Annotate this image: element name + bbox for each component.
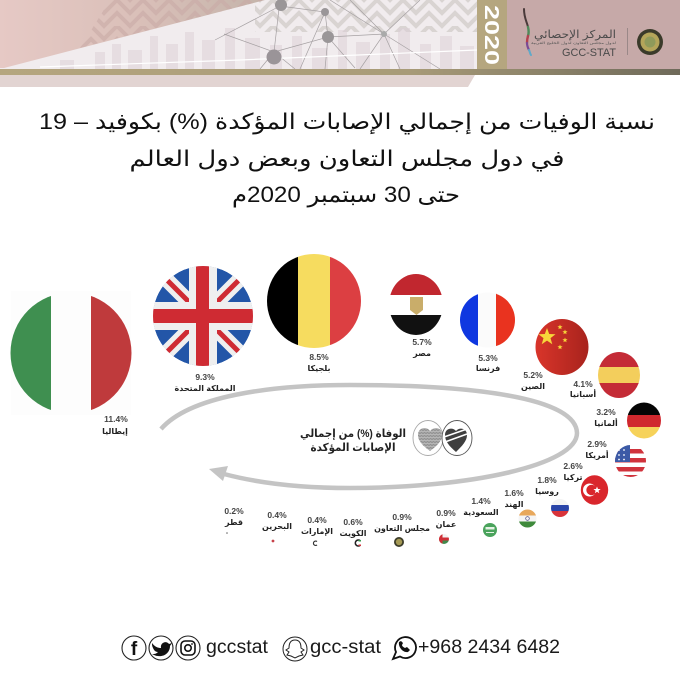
flag: Turkey: [581, 475, 608, 505]
label: United Kingdom: المملكة المتحدة: [175, 384, 236, 393]
icon: twitter: [149, 636, 173, 660]
flag: Kuwait: [355, 540, 361, 546]
flag: Belgium: [267, 250, 362, 350]
flag: Saudi Arabia: [483, 523, 497, 537]
label: Egypt: 5.7%: [412, 337, 432, 347]
label: Saudi Arabia: 1.4%: [471, 496, 491, 506]
icon: GCC emblem: [637, 29, 663, 55]
label: India: الهند: [505, 500, 524, 509]
label: Spain: 4.1%: [573, 379, 593, 389]
label: France: 5.3%: [478, 353, 498, 363]
icon: whatsapp: [393, 637, 416, 659]
label: Kuwait: الكويت: [340, 529, 367, 538]
flag: China: [536, 319, 588, 375]
network lines: [215, 0, 440, 69]
flag: Italy: [10, 290, 132, 415]
label: Germany: 3.2%: [596, 407, 616, 417]
label: GCC: مجلس التعاون: [374, 524, 430, 534]
title: [39, 109, 655, 207]
label: Germany: [594, 407, 618, 428]
flag: Russia: [551, 499, 569, 517]
label: India: [504, 488, 524, 509]
label: Russia: روسيا: [535, 487, 559, 496]
label: USA: [585, 439, 609, 460]
flag: Oman: [439, 534, 449, 544]
label: China: [521, 370, 545, 391]
logo panel: GCC-STAT: [562, 47, 616, 59]
label: Oman: عمان: [436, 520, 456, 529]
label: China: 5.2%: [523, 370, 543, 380]
label: Qatar: 0.2%: [224, 506, 244, 516]
label: Qatar: قطر: [224, 518, 243, 527]
label: Saudi Arabia: [463, 496, 499, 517]
label: Italy: [102, 414, 128, 436]
flag: UAE: [313, 541, 317, 545]
label: China: الصين: [521, 382, 545, 391]
flag: United Kingdom: [153, 266, 253, 366]
label: Russia: [535, 475, 559, 496]
logo panel: [507, 0, 680, 69]
title: نسبة الوفيات من إجمالي الإصابات المؤكدة (%) بكوفيد – 19: [39, 109, 655, 135]
label: United Kingdom: [175, 372, 236, 393]
label: Kuwait: 0.6%: [343, 517, 363, 527]
label: UAE: الإمارات: [301, 527, 333, 536]
label: Oman: [436, 508, 456, 529]
footer: social contacts: +968 2434 6482: [418, 637, 560, 658]
label: Belgium: [308, 352, 330, 373]
label: France: فرنسا: [476, 364, 500, 373]
label: Germany: ألمانيا: [594, 418, 618, 428]
arrow: circular trend: [161, 385, 577, 488]
label: Belgium: بلجيكا: [308, 364, 330, 373]
label: Bahrain: 0.4%: [267, 510, 287, 520]
footer: social contacts: gccstat: [206, 637, 269, 658]
label: UAE: 0.4%: [307, 515, 327, 525]
label: Russia: 1.8%: [537, 475, 557, 485]
footer: social contacts: [122, 636, 560, 661]
flag: Spain: [597, 351, 641, 399]
label: Qatar: [224, 506, 244, 527]
flag: Egypt: [389, 274, 443, 335]
legend text: الإصابات المؤكدة: [310, 442, 396, 454]
label: Saudi Arabia: السعودية: [463, 508, 499, 517]
label: USA: 2.9%: [587, 439, 607, 449]
title: في دول مجلس التعاون وبعض دول العالم: [130, 146, 564, 172]
flag: Qatar: [226, 532, 228, 534]
year panel: 2020: [480, 5, 502, 65]
flag: Germany: [626, 402, 662, 439]
label: Oman: 0.9%: [436, 508, 456, 518]
label: Egypt: مصر: [412, 349, 431, 358]
icon: facebook: f: [131, 639, 138, 660]
header banner: [0, 0, 680, 87]
icon: overlapping hearts: [413, 420, 472, 456]
label: Italy: 11.4%: [104, 414, 128, 424]
label: GCC: [374, 512, 430, 534]
footer: social contacts: gcc-stat: [310, 637, 382, 658]
flag: USA: [615, 445, 646, 477]
label: Turkey: [563, 461, 583, 482]
icon: facebook: [122, 636, 146, 660]
label: United Kingdom: 9.3%: [195, 372, 215, 382]
label: UAE: [301, 515, 333, 536]
label: Turkey: تركيا: [564, 473, 582, 482]
label: France: [476, 353, 500, 373]
icon: GCC-STAT swoosh: [524, 9, 531, 55]
flag: GCC: [394, 537, 404, 547]
label: Italy: إيطاليا: [102, 427, 128, 436]
title: حتى 30 سبتمبر 2020م: [232, 182, 460, 207]
label: Bahrain: البحرين: [262, 522, 292, 531]
label: India: 1.6%: [504, 488, 524, 498]
label: Bahrain: [262, 510, 292, 531]
label: Spain: أسبانيا: [570, 389, 596, 399]
legend text: الوفاة (%) من إجمالي: [300, 428, 406, 440]
label: USA: أمريكا: [585, 450, 609, 460]
flag: France: [460, 292, 516, 348]
logo panel: لدول مجلس التعاون لدول الخليج العربية: [531, 41, 616, 45]
flag: Bahrain: [272, 540, 274, 542]
icon: instagram: [176, 636, 200, 660]
label: Spain: [570, 379, 596, 399]
label: Egypt: [412, 337, 432, 358]
label: Kuwait: [340, 517, 367, 538]
year panel: [477, 0, 507, 69]
flag: India: [518, 510, 536, 528]
label: GCC: 0.9%: [392, 512, 412, 522]
icon: snapchat: [283, 637, 307, 661]
logo panel: المركز الإحصائي: [534, 29, 616, 41]
label: Turkey: 2.6%: [563, 461, 583, 471]
label: Belgium: 8.5%: [309, 352, 329, 362]
legend text: [300, 428, 406, 454]
skyline: [60, 28, 474, 69]
